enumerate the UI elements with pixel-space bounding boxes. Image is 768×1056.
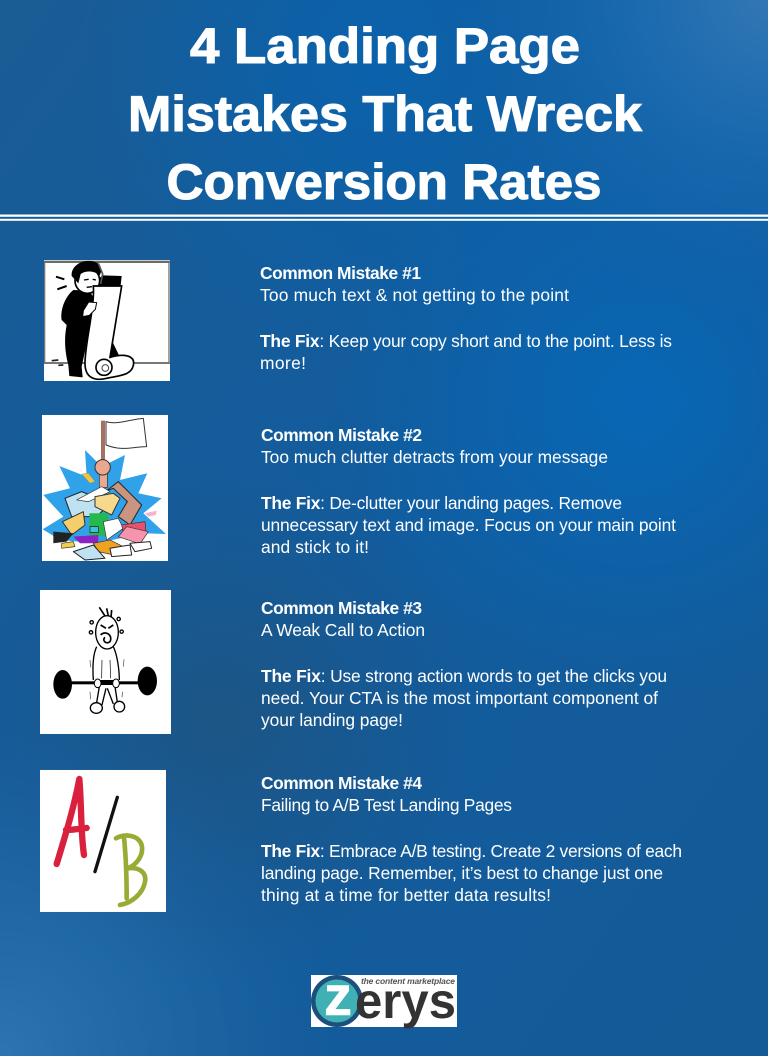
icon: man reading long scroll — [44, 260, 170, 381]
text: mistake 1: The Fix: Keep your copy short and to the point. Less is — [260, 331, 672, 351]
text: mistake 2: unnecessary text and image. Focus on your main point — [261, 515, 676, 535]
title: Conversion Rates — [166, 154, 602, 210]
text: mistake 2 — [261, 425, 676, 557]
text: mistake 3: The Fix: Use strong action words to get the clicks you — [261, 666, 667, 686]
text: mistake 3: your landing page! — [261, 710, 403, 730]
panel: mistake 3 — [40, 590, 667, 734]
text: mistake 4 — [261, 773, 682, 905]
text: mistake 3: A Weak Call to Action — [261, 620, 425, 640]
title: 4 Landing Page — [190, 18, 580, 74]
panel: mistake 4 — [40, 770, 682, 912]
text: mistake 3 — [261, 598, 667, 730]
panel: mistake 2 — [42, 415, 676, 561]
logo: Zerys: the content marketplace — [361, 976, 455, 986]
text: mistake 2: Common Mistake #2 — [261, 425, 422, 445]
text: mistake 1: more! — [260, 353, 306, 373]
text: mistake 1 — [260, 263, 672, 373]
text: mistake 1: Common Mistake #1 — [260, 263, 421, 283]
text: mistake 4: landing page. Remember, it’s best to change just one — [261, 863, 663, 883]
text: mistake 2: Too much clutter detracts from your message — [261, 447, 608, 467]
text: mistake 4: Common Mistake #4 — [261, 773, 422, 793]
text: mistake 4: thing at a time for better data results! — [261, 885, 551, 905]
icon: straining weightlifter — [40, 590, 171, 734]
logo: Zerys — [311, 964, 457, 1029]
text: mistake 3: need. Your CTA is the most important component of — [261, 688, 658, 708]
text: mistake 3: Common Mistake #3 — [261, 598, 422, 618]
text: mistake 4: The Fix: Embrace A/B testing. Create 2 versions of each — [261, 841, 682, 861]
logo: Zerys: erys — [355, 973, 456, 1029]
title — [128, 18, 642, 210]
logo: Zerys: z — [324, 964, 352, 1027]
text: mistake 2: and stick to it! — [261, 537, 369, 557]
icon: A/B lettering — [40, 770, 166, 912]
title: Mistakes That Wreck — [128, 86, 642, 142]
panel: mistake 1 — [44, 260, 672, 381]
icon: buried under clutter with white flag — [42, 415, 168, 561]
text: mistake 2: The Fix: De-clutter your landing pages. Remove — [261, 493, 622, 513]
text: mistake 4: Failing to A/B Test Landing Pages — [261, 795, 512, 815]
text: mistake 1: Too much text & not getting to the point — [260, 285, 569, 305]
